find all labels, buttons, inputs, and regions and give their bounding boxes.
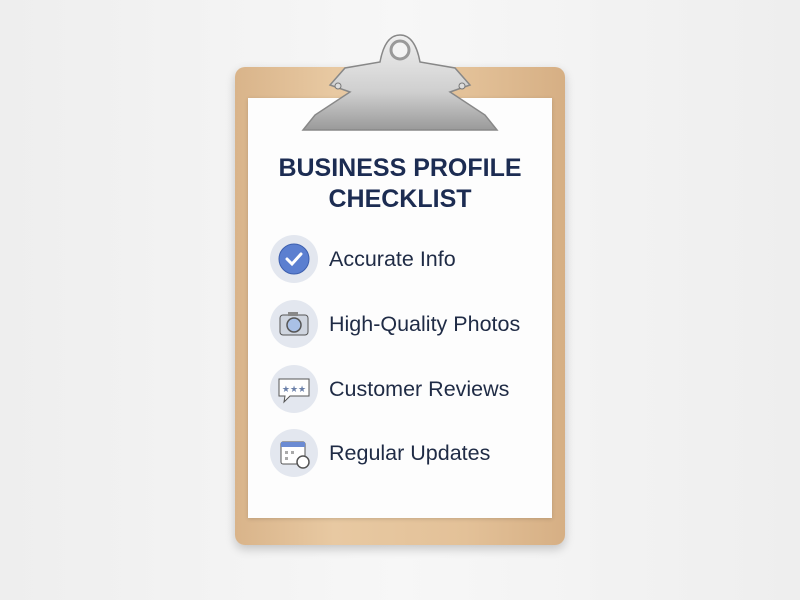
icon: speech bubble: ★★★ [282, 384, 306, 394]
item: accurate info: Accurate Info [329, 247, 456, 271]
item: updates [270, 429, 490, 477]
clipboard board [235, 67, 565, 545]
icon: calendar [270, 429, 318, 477]
title: BUSINESS PROFILE [278, 154, 522, 182]
icon: speech bubble [270, 365, 318, 413]
title: CHECKLIST [328, 185, 472, 213]
item: updates: Regular Updates [329, 441, 490, 465]
item: reviews: Customer Reviews [329, 377, 509, 401]
item: accurate info [270, 235, 456, 283]
item: photos: High-Quality Photos [329, 312, 520, 336]
title [278, 154, 522, 213]
item: photos [270, 300, 520, 348]
paper [248, 98, 552, 518]
item: reviews [270, 365, 509, 413]
icon: camera [270, 300, 318, 348]
icon: check [270, 235, 318, 283]
clip [302, 34, 498, 131]
